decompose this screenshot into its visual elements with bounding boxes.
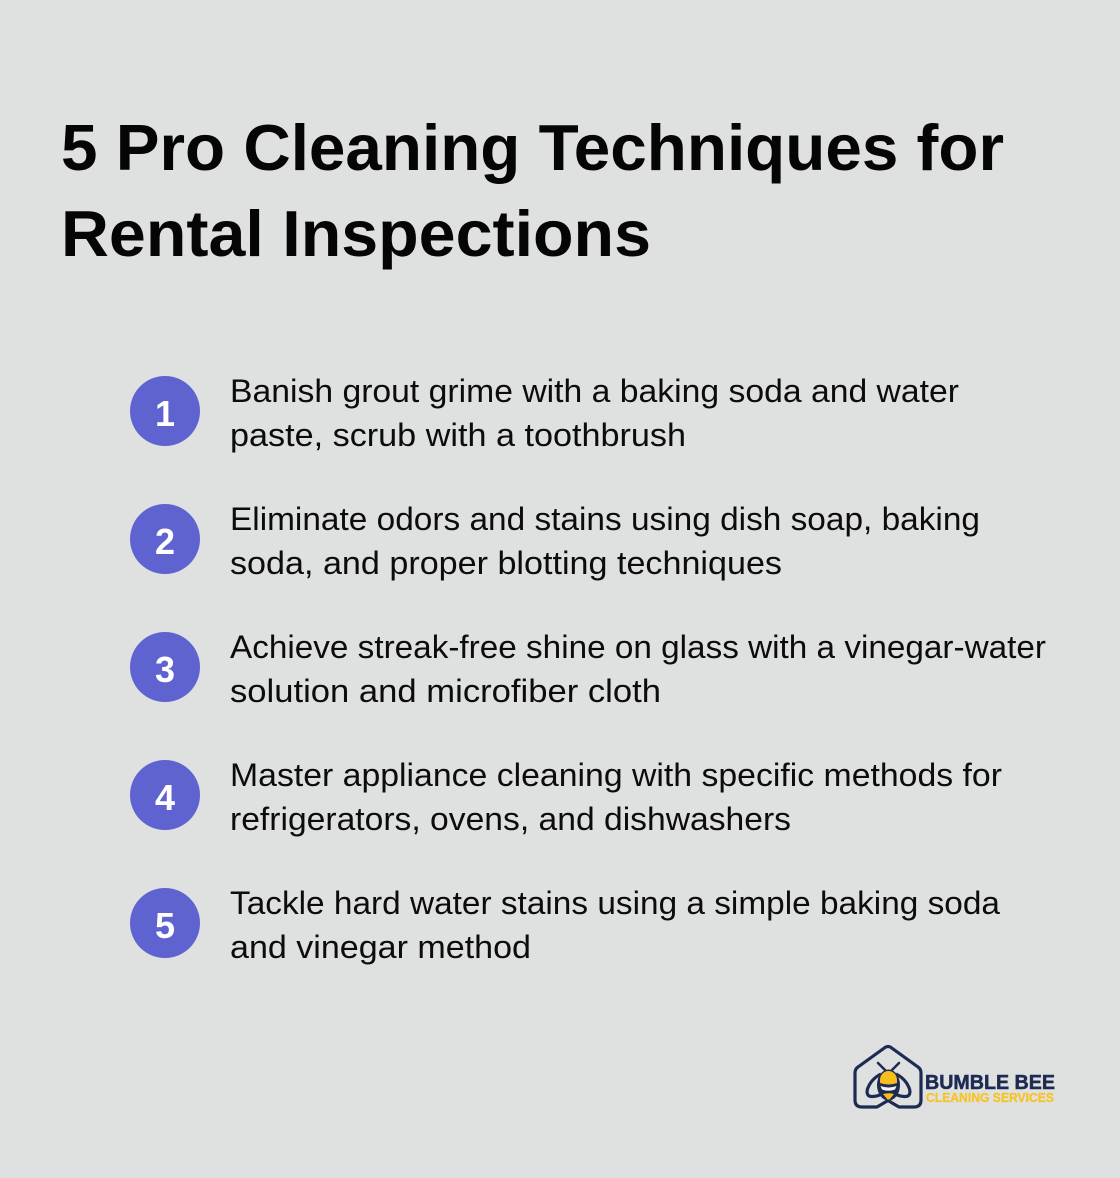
bee wings — [867, 1074, 910, 1097]
list item 5 — [130, 885, 1001, 965]
number badge 2 — [130, 504, 200, 574]
item 3 text: Achieve streak-free shine on glass with a vinegar-water — [230, 629, 1046, 665]
title: 5 Pro Cleaning Techniques for — [61, 111, 1004, 184]
list item 2 — [130, 501, 980, 581]
item 4 text: Master appliance cleaning with specific methods for — [230, 757, 1002, 793]
item 4 text: refrigerators, ovens, and dishwashers — [230, 801, 791, 837]
item 3 text — [230, 629, 1046, 709]
logo tagline: CLEANING SERVICES — [926, 1091, 1054, 1105]
item 1 text: Banish grout grime with a baking soda and water — [230, 373, 959, 409]
item 5 text: Tackle hard water stains using a simple baking soda — [230, 885, 1001, 921]
house outline — [855, 1046, 921, 1107]
title: Rental Inspections — [61, 197, 651, 270]
number badge 1 — [130, 376, 200, 446]
item 2 text — [230, 501, 980, 581]
item 4 text — [230, 757, 1002, 837]
number badge 2: 2 — [155, 521, 175, 562]
number badge 3: 3 — [155, 649, 175, 690]
number badge 3 — [130, 632, 200, 702]
bee antennae — [878, 1063, 899, 1070]
icon: house with bee — [855, 1046, 921, 1107]
item 2 text: soda, and proper blotting techniques — [230, 545, 782, 581]
bee body — [877, 1070, 900, 1100]
item 5 text — [230, 885, 1001, 965]
item 1 text: paste, scrub with a toothbrush — [230, 417, 686, 453]
title — [61, 111, 1004, 270]
list item 4 — [130, 757, 1002, 837]
number badge 5: 5 — [155, 905, 175, 946]
number badge 4: 4 — [155, 777, 175, 818]
item 2 text: Eliminate odors and stains using dish soap, baking — [230, 501, 980, 537]
list item 1 — [130, 373, 959, 453]
item 1 text — [230, 373, 959, 453]
item 3 text: solution and microfiber cloth — [230, 673, 661, 709]
item 5 text: and vinegar method — [230, 929, 531, 965]
logo: Bumble Bee Cleaning Services — [855, 1046, 1055, 1107]
number badge 1: 1 — [155, 393, 175, 434]
logo wordmark: BUMBLE BEE — [925, 1071, 1055, 1094]
number badge 4 — [130, 760, 200, 830]
list item 3 — [130, 629, 1046, 709]
number badge 5 — [130, 888, 200, 958]
